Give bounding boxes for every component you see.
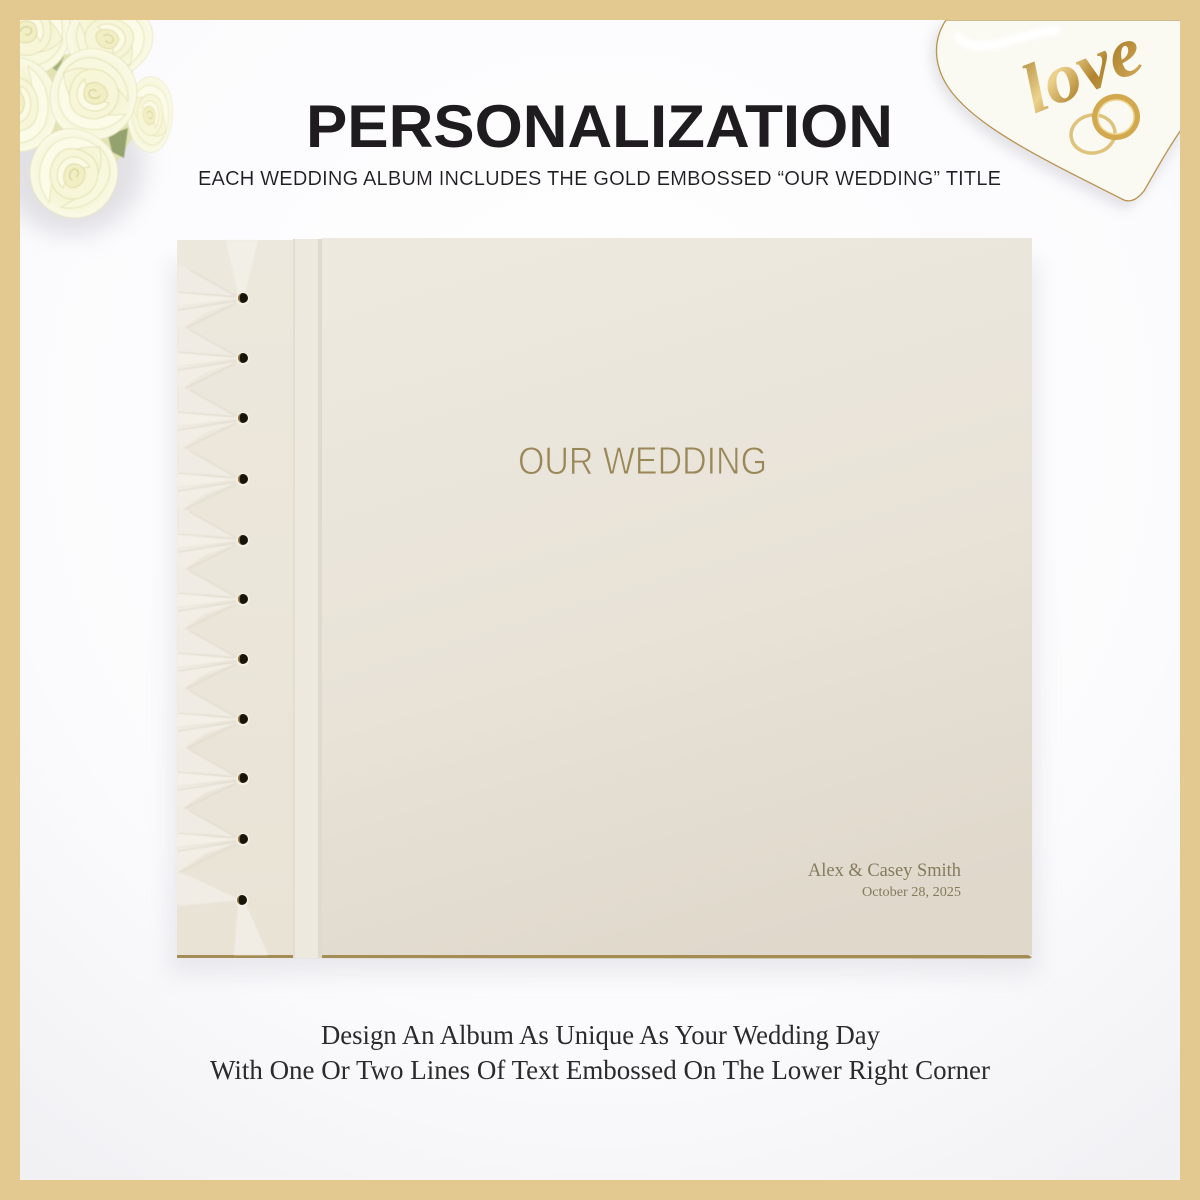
album shadow xyxy=(170,262,1038,974)
embossed date: October 28, 2025 xyxy=(862,885,961,900)
image: heart ceramic ring dish xyxy=(932,12,1182,210)
wedding rings xyxy=(1068,94,1140,157)
ribbon lacing xyxy=(177,240,268,955)
subtitle: EACH WEDDING ALBUM INCLUDES THE GOLD EMBOSSED “OUR WEDDING” TITLE xyxy=(198,168,1001,190)
binding holes xyxy=(236,292,250,907)
album front cover xyxy=(322,238,1032,955)
embossed names: Alex & Casey Smith xyxy=(808,861,961,881)
album xyxy=(170,238,1038,974)
love lettering: love xyxy=(1011,12,1153,129)
album spine panel xyxy=(177,240,293,955)
image: white roses bouquet xyxy=(20,20,174,240)
caption line one: Design An Album As Unique As Your Wedding Day xyxy=(321,1020,880,1050)
title: PERSONALIZATION xyxy=(306,93,893,160)
caption xyxy=(210,1020,990,1085)
album hinge ridge xyxy=(293,239,322,958)
embossed title: OUR WEDDING xyxy=(518,440,767,483)
album page edge xyxy=(177,955,1032,958)
caption line two: With One Or Two Lines Of Text Embossed On The Lower Right Corner xyxy=(210,1055,990,1085)
